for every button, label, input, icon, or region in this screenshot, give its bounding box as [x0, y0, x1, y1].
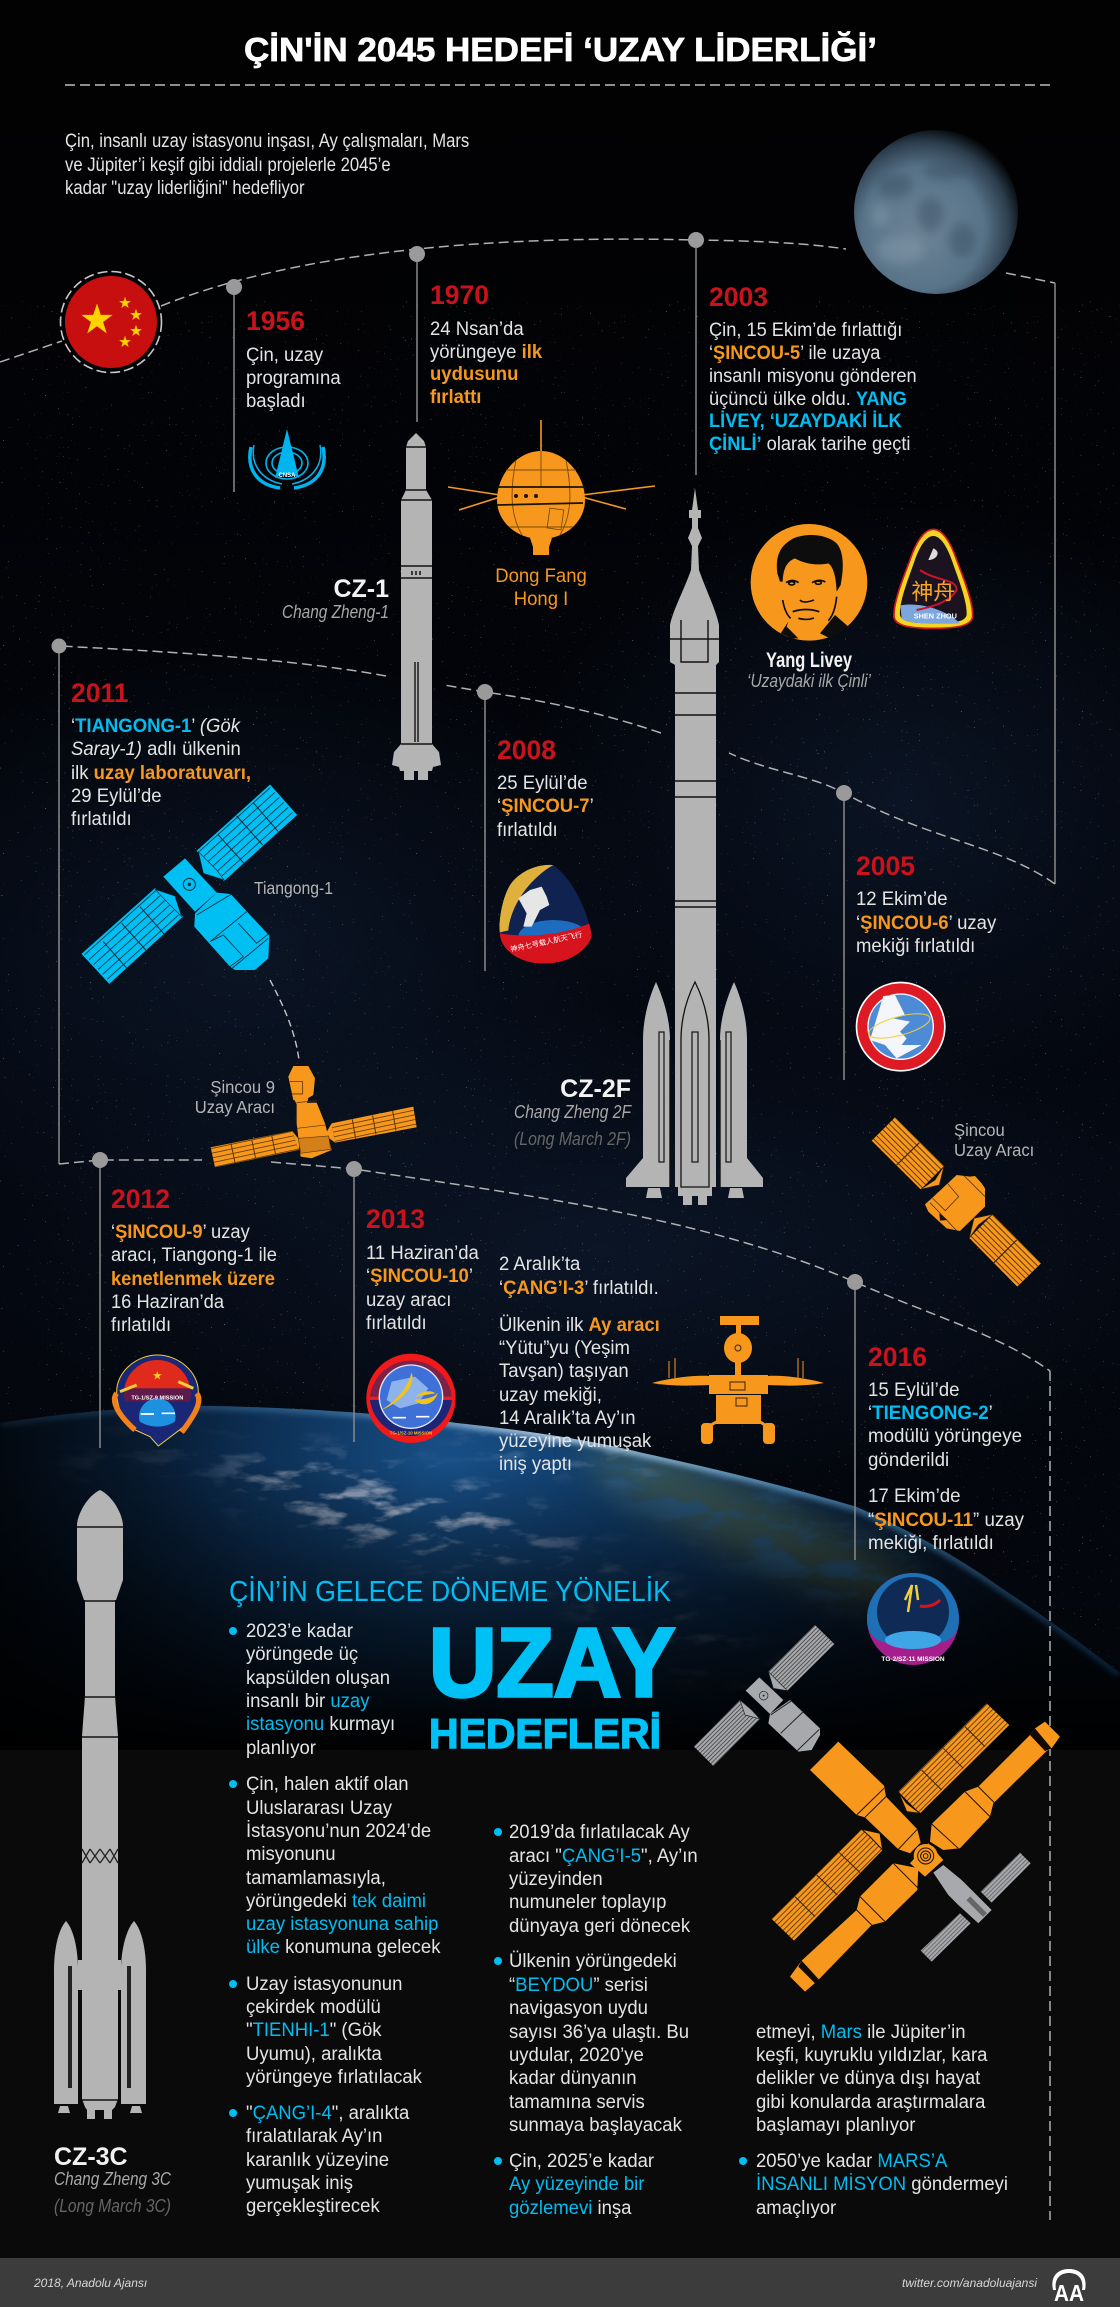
goals column 2: sayısı 36’ya ulaştı. Bu: [509, 2022, 689, 2043]
goals column 2: sunmaya başlayacak: [509, 2115, 682, 2136]
text: Chang'e-3: “Yütu”yu (Yeşim: [499, 1338, 630, 1359]
goals column 1: tamamlamasıyla,: [246, 1868, 386, 1889]
spacecraft: Şincou 9: [211, 1066, 417, 1167]
label: CZ-1: CZ-1: [333, 575, 389, 603]
text 2011: fırlatıldı: [71, 809, 132, 830]
badge: TG-1/SZ-9: [115, 1355, 199, 1446]
label: CZ-2F: (Long March 2F): [514, 1129, 631, 1149]
goals column 3: başlamayı planlıyor: [756, 2115, 916, 2136]
goals column 2: numuneler toplayıp: [509, 1892, 666, 1913]
earth: [0, 1390, 1120, 1760]
goals column 1: Çin, halen aktif olan: [246, 1774, 409, 1795]
heading: future goals: HEDEFLERİ: [429, 1710, 661, 1757]
intro text: Çin, insanlı uzay istasyonu inşası, Ay çalışmaları, Mars: [65, 130, 469, 151]
label: Tiangong-1: Tiangong-1: [254, 878, 333, 898]
panel: 2012: [92, 1152, 277, 1448]
panel: 2016: [847, 1274, 1024, 1665]
badge: TG-2/SZ-11: [867, 1573, 959, 1665]
text 2008: ‘ŞINCOU-7’: [497, 796, 594, 817]
footer bar: [0, 2258, 1120, 2307]
label: Yang Livey: [747, 649, 872, 691]
badge: Shenzhou-7: [500, 864, 592, 964]
year 2013: 2013: [366, 1204, 425, 1234]
panel: 1970: [409, 246, 543, 422]
label: Dong Fang Hong I: Hong I: [514, 589, 568, 610]
text 1970: 24 Nsan’da: [430, 319, 524, 340]
goals column 2: tamamına servis: [509, 2092, 645, 2113]
goals column 1: Uyumu), aralıkta: [246, 2044, 382, 2065]
goals column 1: uzay istasyonuna sahip: [246, 1914, 438, 1935]
goals column 3: 2050’ye kadar MARS’A: [756, 2151, 947, 2172]
panel: 2011: [52, 638, 251, 830]
goals column 2: navigasyon uydu: [509, 1998, 648, 2019]
text 2003: LİVEY, ‘UZAYDAKİ İLK: [709, 409, 902, 431]
goals column 1: ülke konumuna gelecek: [246, 1937, 440, 1958]
footer credits: twitter.com/anadoluajansi: [902, 2276, 1037, 2290]
intro text: kadar "uzay liderliğini" hedefliyor: [65, 177, 305, 198]
gray module: [694, 1625, 834, 1766]
text 2011: Saray-1) adlı ülkenin: [71, 739, 241, 760]
text 2016: 15 Eylül’de: [868, 1380, 960, 1401]
text 1970: fırlattı: [430, 387, 481, 408]
orange station: [772, 1703, 1060, 1992]
text 2005: 12 Ekim’de: [856, 889, 948, 910]
rocket: CZ-2F: [626, 488, 763, 1205]
year 2008: 2008: [497, 735, 556, 765]
goals column 1: 2023’e kadar: [246, 1621, 354, 1642]
goals column 1: istasyonu kurmayı: [246, 1714, 395, 1735]
year 2012: 2012: [111, 1184, 170, 1214]
label: CZ-2F: CZ-2F: [560, 1075, 631, 1103]
icon: lunar lander: [652, 1316, 824, 1444]
label: Şincou Uzay Aracı: Şincou: [954, 1121, 1005, 1140]
text: Chang'e-3: yüzeyine yumuşak: [499, 1431, 652, 1452]
text: Chang'e-3: Tavşan) taşıyan: [499, 1361, 629, 1382]
badge: TG-1/SZ-9: TG-1/SZ-9 MISSION: [131, 1396, 183, 1402]
badge: Shenzhou patch: [894, 529, 973, 628]
text 1956: programına: [246, 368, 341, 389]
goals column 1: gerçekleştirecek: [246, 2196, 380, 2217]
goals column 3: [739, 2022, 1008, 2219]
text 2012: fırlatıldı: [111, 1315, 171, 1336]
text: Chang'e-3: uzay mekiği,: [499, 1385, 602, 1406]
goals column 2: uydular, 2020’ye: [509, 2045, 644, 2066]
text 2016: 17 Ekim’de: [868, 1486, 961, 1507]
badge: Shenzhou-7: 神舟七号载人航天飞行: [509, 930, 583, 954]
label: Şincou 9: Uzay Aracı: [195, 1098, 275, 1117]
lower black band and footer: [0, 1750, 1120, 2307]
text 2016: ‘TIENGONG-2’: [868, 1403, 993, 1424]
goals column 1: [229, 1621, 441, 2217]
text 2005: mekiği fırlatıldı: [856, 936, 975, 957]
goals column 2: Ülkenin yörüngedeki: [509, 1951, 677, 1972]
text 2011: 29 Eylül’de: [71, 786, 162, 807]
text 2012: 16 Haziran’da: [111, 1292, 224, 1313]
panel: 1956: [226, 279, 341, 492]
goals column 2: “BEYDOU” serisi: [509, 1975, 648, 1996]
goals column 1: yörüngedeki tek daimi: [246, 1891, 426, 1912]
moon: [854, 130, 1018, 294]
goals column 1: kapsülden oluşan: [246, 1668, 390, 1689]
arrow: docking path: [270, 980, 299, 1060]
text 2016: gönderildi: [868, 1450, 949, 1471]
label: CZ-2F: Chang Zheng 2F: [514, 1102, 632, 1122]
panel: 2008: [477, 684, 600, 971]
text 2012: kenetlenmek üzere: [111, 1269, 275, 1290]
text 2016: modülü yörüngeye: [868, 1426, 1022, 1447]
goals column 1: çekirdek modülü: [246, 1997, 381, 2018]
text 2012: ‘ŞINCOU-9’ uzay: [111, 1222, 250, 1243]
text 2011: ‘TIANGONG-1’ (Gök: [71, 716, 240, 737]
goals column 2: dünyaya geri dönecek: [509, 1916, 691, 1937]
badge: TG-1/SZ-10: TG-1/SZ-10 MISSION: [390, 1430, 432, 1435]
goals column 3: etmeyi, Mars ile Jüpiter’in: [756, 2022, 965, 2043]
text: Chang'e-3: 14 Aralık’ta Ay’ın: [499, 1408, 635, 1429]
goals column 2: Çin, 2025’e kadar: [509, 2151, 655, 2172]
goals column 1: karanlık yüzeyine: [246, 2150, 389, 2171]
text 1956: Çin, uzay: [246, 345, 324, 366]
space station illustration: [694, 1625, 1060, 1992]
text 2013: ‘ŞINCOU-10’: [366, 1266, 473, 1287]
text 2003: insanlı misyonu gönderen: [709, 364, 917, 386]
goals column 2: aracı "ÇANG’I-5", Ay’ın: [509, 1846, 698, 1867]
panel: 2005: [836, 785, 997, 1080]
flag of China: [60, 272, 162, 372]
label: Şincou 9: Şincou 9: [210, 1078, 275, 1097]
text 2013: uzay aracı: [366, 1290, 451, 1311]
gray docked craft: [921, 1853, 1031, 1962]
goals column 1: planlıyor: [246, 1738, 317, 1759]
text 2016: “ŞINCOU-11” uzay: [868, 1510, 1024, 1531]
text 1970: uydusunu: [430, 364, 518, 385]
title divider: [65, 84, 1055, 86]
logo: AA: [1052, 2269, 1086, 2306]
goals column 1: Uluslararası Uzay: [246, 1798, 393, 1819]
heading: future goals: ÇİN’İN GELECE DÖNEME YÖNELİK: [229, 1575, 672, 1608]
goals column 2: 2019’da fırlatılacak Ay: [509, 1822, 690, 1843]
satellite: Dong Fang Hong I: [448, 420, 655, 555]
label: CZ-3C: (Long March 3C): [54, 2196, 171, 2216]
text 2013: fırlatıldı: [366, 1313, 427, 1334]
text 2013: 11 Haziran’da: [366, 1243, 479, 1264]
text 2016: mekiği, fırlatıldı: [868, 1533, 994, 1554]
rocket: CZ-1: [392, 433, 441, 780]
intro text: ve Jüpiter’i keşif gibi iddialı projelerle 2045’e: [65, 154, 391, 175]
goals column 1: yörüngeye fırlatılacak: [246, 2067, 422, 2088]
text 2011: ilk uzay laboratuvarı,: [71, 763, 251, 784]
year 2011: 2011: [71, 678, 128, 708]
panel: 2013: [346, 1161, 479, 1443]
goals column 1: "ÇANG’I-4", aralıkta: [246, 2103, 409, 2124]
label: CZ-2F: [514, 1075, 632, 1149]
title: ÇİN'İN 2045 HEDEFİ ‘UZAY LİDERLİĞİ’: [244, 31, 877, 69]
heading: future goals: UZAY: [429, 1608, 675, 1717]
text: Chang'e-3: Ülkenin ilk Ay aracı: [499, 1315, 660, 1336]
text 2003: ÇİNLİ’ olarak tarihe geçti: [709, 432, 910, 454]
year 2003: 2003: [709, 282, 768, 312]
goals column 1: yumuşak iniş: [246, 2173, 353, 2194]
footer credits: 2018, Anadolu Ajansı: [33, 2276, 147, 2290]
goals column 1: İstasyonu’nun 2024’de: [246, 1821, 431, 1842]
text: Chang'e-3: ‘ÇANG’I-3’ fırlatıldı.: [499, 1278, 659, 1299]
panel: 2003: [688, 232, 917, 475]
heading: future goals: [229, 1575, 675, 1757]
year 1956: 1956: [246, 306, 305, 336]
text 2003: ‘ŞINCOU-5’ ile uzaya: [709, 341, 880, 363]
goals column 1: fıralatılarak Ay’ın: [246, 2126, 382, 2147]
year 2005: 2005: [856, 851, 915, 881]
text: Chang'e-3: 2 Aralık’ta: [499, 1254, 581, 1275]
goals column 3: amaçlıyor: [756, 2198, 837, 2219]
rocket: CZ-3C: [54, 1490, 146, 2119]
label: CZ-3C: [54, 2143, 172, 2216]
label: CZ-3C: CZ-3C: [54, 2143, 128, 2171]
label: Yang Livey: Yang Livey: [766, 649, 852, 672]
goals column 2: kadar dünyanın: [509, 2068, 637, 2089]
goals column 1: misyonunu: [246, 1844, 336, 1865]
footer credits: [33, 2269, 1086, 2306]
goals column 1: "TIENHI-1" (Gök: [246, 2020, 382, 2041]
label: Yang Livey: ‘Uzaydaki ilk Çinli’: [747, 671, 872, 691]
badge: TG-2/SZ-11: TG-2/SZ-11 MISSION: [881, 1656, 945, 1663]
icon: CNSA logo: CNSA: [278, 473, 296, 479]
badge: Shenzhou patch: 神舟: [911, 579, 955, 604]
text 1970: yörüngeye ilk: [430, 342, 542, 363]
label: CZ-1: [282, 575, 389, 622]
goals column 3: keşfi, kuyruklu yıldızlar, kara: [756, 2045, 988, 2066]
text: Chang'e-3: iniş yaptı: [499, 1454, 572, 1475]
text 2008: fırlatıldı: [497, 820, 558, 841]
badge: Shenzhou patch: SHEN ZHOU: [914, 611, 957, 620]
goals column 3: gibi konularda araştırmalara: [756, 2092, 986, 2113]
label: Şincou Uzay Aracı: Uzay Aracı: [954, 1141, 1034, 1160]
goals column 2: yüzeyinden: [509, 1869, 603, 1890]
year 1970: 1970: [430, 280, 489, 310]
icon: CNSA logo: [250, 429, 324, 488]
text 2003: Çin, 15 Ekim’de fırlattığı: [709, 318, 902, 340]
label: Dong Fang Hong I: Dong Fang: [495, 566, 587, 587]
label: CZ-1: Chang Zheng-1: [282, 602, 389, 622]
goals column 1: yörüngede üç: [246, 1644, 358, 1665]
badge: TG-1/SZ-10: [366, 1354, 456, 1443]
spacecraft: Şincou Uzay Aracı: [872, 1117, 1041, 1287]
badge: Shenzhou-6: [856, 982, 946, 1072]
text 2003: üçüncü ülke oldu. YANG: [709, 387, 907, 409]
label: CZ-3C: Chang Zheng 3C: [54, 2169, 172, 2189]
goals column 1: insanlı bir uzay: [246, 1691, 369, 1712]
text 2005: ‘ŞINCOU-6’ uzay: [856, 913, 996, 934]
logo: AA: AA: [1054, 2280, 1084, 2306]
goals column 3: İNSANLI MİSYON göndermeyi: [756, 2174, 1008, 2195]
portrait: Yang Livey: [751, 524, 867, 641]
year 2016: 2016: [868, 1342, 927, 1372]
goals column 2: gözlemevi inşa: [509, 2198, 631, 2219]
goals column 1: Uzay istasyonunun: [246, 1974, 402, 1995]
goals column 2: Ay yüzeyinde bir: [509, 2174, 645, 2195]
goals column 2: [494, 1822, 698, 2219]
spacecraft: Tiangong-1: [83, 786, 296, 983]
text 2008: 25 Eylül’de: [497, 773, 588, 794]
goals column 3: delikler ve dünya dışı hayat: [756, 2068, 981, 2089]
text 1956: başladı: [246, 391, 306, 412]
text 2012: aracı, Tiangong-1 ile: [111, 1245, 277, 1266]
